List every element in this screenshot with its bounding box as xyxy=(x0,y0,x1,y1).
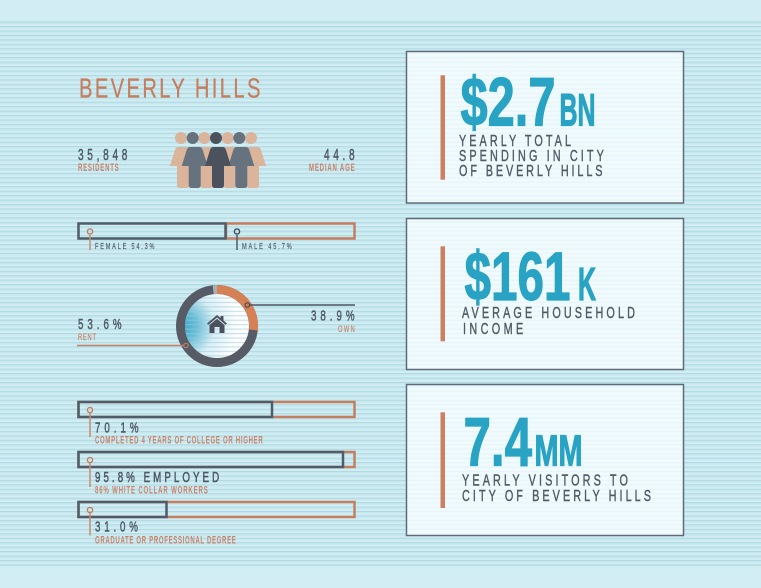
icon: house xyxy=(207,315,227,333)
college bar xyxy=(78,402,354,446)
own callout xyxy=(245,303,355,334)
graduate degree bar xyxy=(78,502,354,546)
panel: average household income: K xyxy=(578,258,596,310)
panel: yearly total spending: SPENDING IN CITY xyxy=(459,147,604,164)
rent callout: RENT xyxy=(78,332,96,342)
panel: average household income: AVERAGE HOUSEHOLD xyxy=(462,304,635,321)
graduate degree bar: GRADUATE OR PROFESSIONAL DEGREE xyxy=(95,533,236,546)
panel: yearly visitors: MM xyxy=(534,426,582,476)
rent callout xyxy=(77,316,188,348)
female marker: FEMALE 54.3% xyxy=(95,243,154,251)
donut chart: rent vs own xyxy=(77,289,355,362)
panel: yearly total spending xyxy=(406,52,684,203)
panel: yearly visitors: CITY OF BEVERLY HILLS xyxy=(462,487,651,504)
residents stat: RESIDENTS xyxy=(78,161,119,173)
panel: yearly total spending: YEARLY TOTAL xyxy=(459,132,571,149)
male marker xyxy=(234,229,292,251)
panel: yearly total spending: BN xyxy=(560,84,596,136)
employment bar: 95.8% EMPLOYED xyxy=(95,469,219,486)
panel: yearly visitors: 7.4 xyxy=(464,404,532,480)
title: BEVERLY HILLS xyxy=(79,73,260,104)
employment bar xyxy=(78,452,354,496)
residents stat: 35,848 xyxy=(78,146,127,164)
panel: average household income: INCOME xyxy=(463,320,523,337)
residents stat xyxy=(78,146,127,173)
gender bar chart xyxy=(78,224,354,251)
graduate degree bar: 31.0% xyxy=(95,519,138,535)
panel: population xyxy=(78,132,355,188)
female marker xyxy=(87,229,154,251)
panel: yearly total spending: $2.7 xyxy=(460,64,556,140)
college bar: 70.1% xyxy=(95,419,139,436)
icon: group of people xyxy=(170,132,266,188)
panel: yearly total spending: OF BEVERLY HILLS xyxy=(459,162,603,179)
panel: yearly visitors xyxy=(406,384,684,536)
male marker: MALE 45.7% xyxy=(242,243,292,251)
panel: average household income xyxy=(406,218,684,370)
employment bar: 86% WHITE COLLAR WORKERS xyxy=(95,484,208,496)
own callout: 38.9% xyxy=(311,307,355,324)
own callout: OWN xyxy=(338,324,355,334)
college bar: COMPLETED 4 YEARS OF COLLEGE OR HIGHER xyxy=(95,434,263,446)
median age stat xyxy=(309,146,355,173)
rent callout: 53.6% xyxy=(78,316,122,333)
median age stat: 44.8 xyxy=(324,146,355,164)
median age stat: MEDIAN AGE xyxy=(309,161,355,173)
panel: yearly visitors: YEARLY VISITORS TO xyxy=(462,472,628,489)
panel: average household income: $161 xyxy=(464,238,570,315)
